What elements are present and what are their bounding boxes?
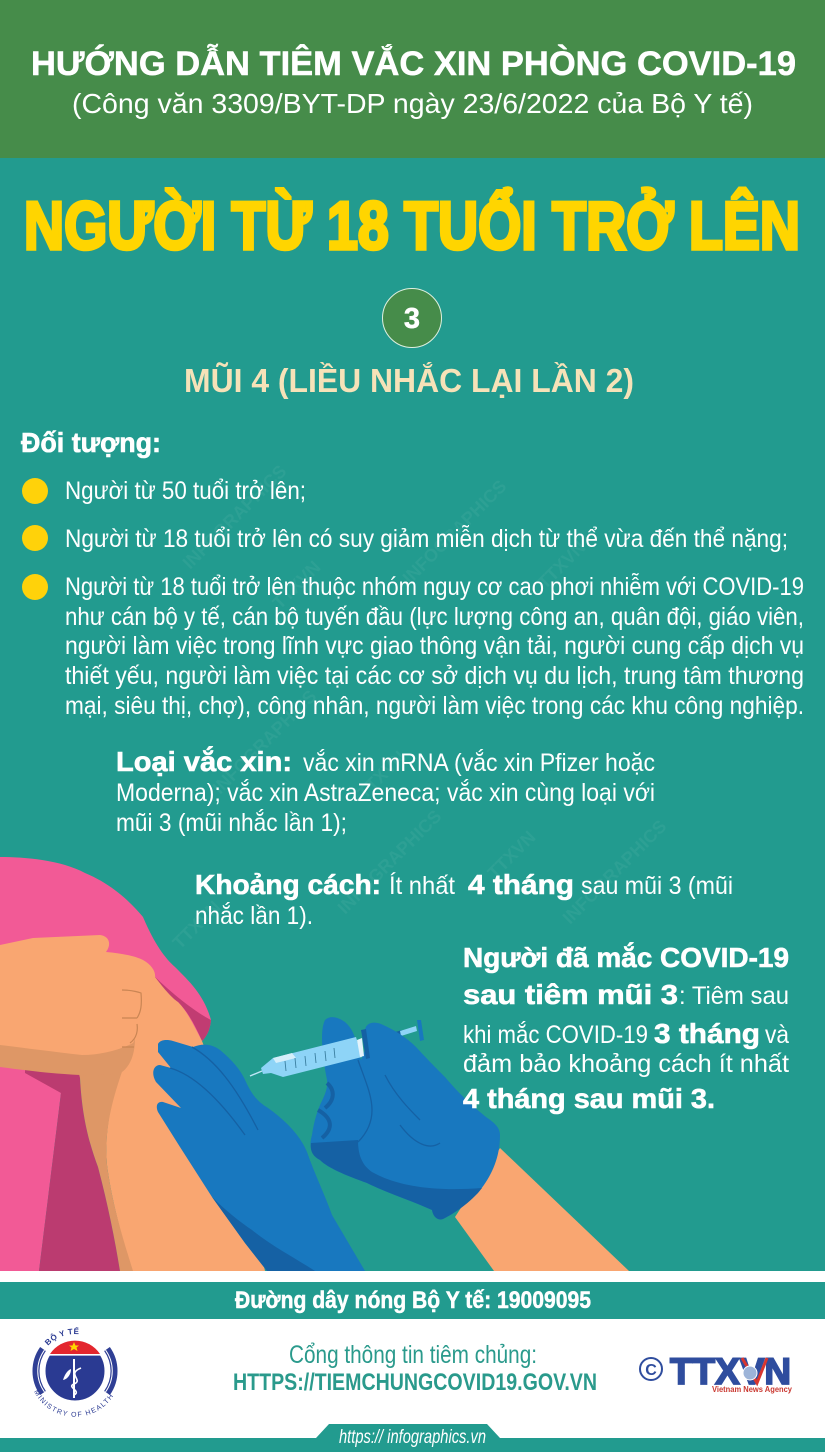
text block: people who had COVID-19: 4 tháng sau mũi 3.	[463, 1083, 715, 1114]
text block: vaccine type: mũi 3 (mũi nhắc lần 1);	[116, 808, 347, 837]
left glove shade	[212, 1197, 315, 1271]
illustration: vaccination	[0, 857, 629, 1271]
lower clothing dark	[25, 1060, 120, 1271]
text block: people who had COVID-19: đảm bảo khoảng cách ít nhất	[463, 1050, 789, 1078]
shawl	[0, 857, 211, 1041]
upper arm	[106, 960, 265, 1271]
watermarks: INFOGRAPHICS	[559, 816, 670, 928]
watermarks: TTXVN	[534, 537, 590, 593]
watermarks	[169, 461, 670, 953]
left glove creases	[170, 1047, 258, 1135]
hotline text: Đường dây nóng Bộ Y tế: 19009095	[235, 1287, 591, 1314]
watermarks: INFOGRAPHICS	[179, 461, 290, 573]
bottom band	[0, 1438, 825, 1452]
text block: vaccine type	[116, 746, 655, 837]
text block: people who had COVID-19: và	[765, 1021, 789, 1049]
text block: interval: Khoảng cách:	[195, 869, 381, 900]
logo: Ministry of Health	[32, 1327, 118, 1417]
logo: TTXVN: TTXVN	[670, 1351, 791, 1392]
needle	[250, 1071, 262, 1076]
hotline band	[0, 1282, 825, 1319]
header band	[0, 0, 825, 158]
arm shade	[78, 1066, 133, 1271]
fist creases	[122, 990, 141, 1047]
plunger	[366, 1020, 424, 1047]
dose heading: MŨI 4 (LIỀU NHẮC LẠI LẦN 2)	[184, 362, 634, 399]
lower clothing light	[0, 1055, 61, 1271]
text block: vaccine type: Moderna); vắc xin AstraZeneca; vắc xin cùng loại với	[116, 778, 655, 807]
text block: vaccine type: vắc xin mRNA (vắc xin Pfizer hoặc	[303, 748, 655, 777]
footer panel	[0, 1271, 825, 1452]
bullet 3	[22, 572, 804, 720]
logo: TTXVN: C	[645, 1362, 657, 1379]
text block: interval: 4 tháng	[468, 869, 574, 900]
watermarks: TTXVN	[354, 747, 410, 803]
logo: Ministry of Health: BỘ Y TẾ	[44, 1327, 79, 1346]
text block: people who had COVID-19	[463, 942, 789, 1114]
text block: people who had COVID-19: Người đã mắc COVID-19	[463, 942, 789, 973]
watermarks: TTXVN	[484, 827, 540, 883]
wrist shade	[0, 1038, 135, 1075]
text block: people who had COVID-19: khi mắc COVID-19	[463, 1020, 648, 1049]
right glove shade	[311, 1140, 482, 1219]
watermarks: INFOGRAPHICS	[399, 476, 510, 588]
right arm	[455, 1148, 629, 1271]
website text: https:// infographics.vn	[339, 1427, 486, 1448]
text block: people who had COVID-19: : Tiêm sau	[679, 982, 789, 1010]
right glove	[311, 1017, 500, 1219]
text block: interval	[195, 869, 733, 930]
text block: interval: nhắc lần 1).	[195, 901, 313, 930]
subtitle: (Công văn 3309/BYT-DP ngày 23/6/2022 của Bộ Y tế)	[72, 88, 753, 119]
watermarks: INFOGRAPHICS	[209, 686, 320, 798]
right glove creases	[358, 1060, 440, 1146]
shawl shadow	[150, 972, 211, 1041]
left glove	[153, 1040, 365, 1271]
fist	[0, 935, 155, 1055]
watermarks: TTXVN	[169, 897, 225, 953]
text block: interval: sau mũi 3 (mũi	[581, 872, 733, 900]
text block: interval: Ít nhất	[389, 871, 455, 900]
heading: target group: Đối tượng:	[21, 427, 161, 458]
watermarks: TTXVN	[269, 557, 325, 613]
text block: people who had COVID-19: 3 tháng	[654, 1018, 760, 1049]
watermarks: INFOGRAPHICS	[334, 806, 445, 918]
text block: vaccine type: Loại vắc xin:	[116, 746, 292, 777]
text block: people who had COVID-19: sau tiêm mũi 3	[463, 979, 678, 1010]
number badge	[382, 288, 442, 348]
title: HƯỚNG DẪN TIÊM VẮC XIN PHÒNG COVID-19	[31, 45, 796, 83]
bullet 1: Người từ 50 tuổi trở lên;	[65, 477, 306, 505]
bullet list	[22, 477, 804, 720]
number badge: 3	[404, 303, 420, 335]
portal URL: HTTPS://TIEMCHUNGCOVID19.GOV.VN	[233, 1369, 597, 1396]
syringe	[261, 1029, 370, 1077]
bottom tab	[316, 1424, 500, 1438]
logo: Ministry of Health: MINISTRY OF HEALTH	[34, 1390, 113, 1417]
portal label: Cổng thông tin tiêm chủng:	[289, 1341, 537, 1369]
logo: TTXVN: Vietnam News Agency	[712, 1384, 792, 1394]
